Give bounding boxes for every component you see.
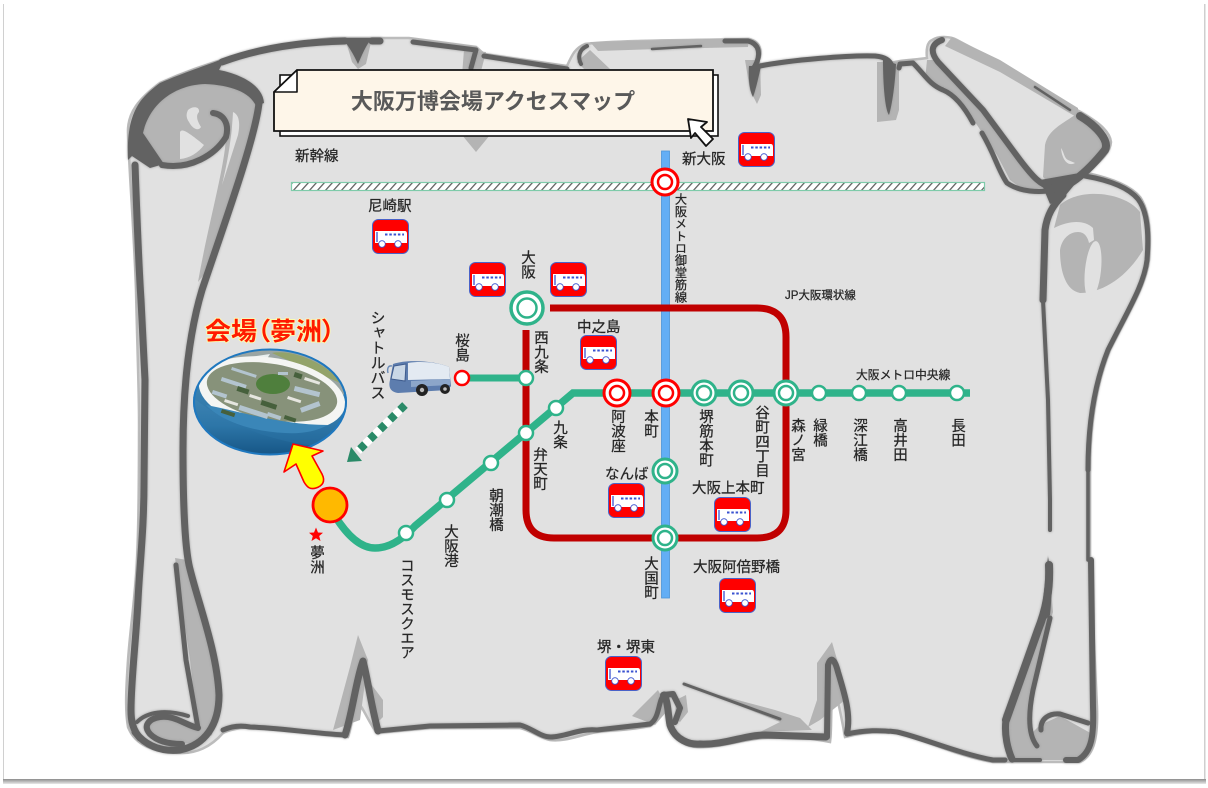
station labels: なんば [605, 466, 649, 483]
station labels: 九条 [551, 420, 567, 449]
red double-ring stations [604, 169, 679, 406]
venue aerial image [193, 348, 347, 456]
gray fold areas [140, 37, 1143, 760]
label: shinkansen: 新幹線 [295, 148, 339, 165]
title banner [274, 70, 718, 146]
label: loop line: JP大阪環状線 [785, 288, 856, 302]
bus icon: Namba [608, 484, 644, 518]
station labels: 新大阪 [682, 151, 726, 168]
bus icon: Sakai [606, 656, 642, 690]
station labels: 大阪阿倍野橋 [693, 559, 780, 576]
parchment scroll background [126, 37, 1150, 762]
bus icon: Osaka-Uehommachi [714, 498, 750, 532]
label: Midosuji line: 大阪メトロ御堂筋線 [673, 193, 687, 303]
station labels: 本町 [642, 409, 658, 438]
bus icon: Osaka left [470, 262, 506, 296]
station labels: 深江橋 [851, 418, 867, 462]
light highlights inside folds [180, 107, 1104, 300]
station labels: 大阪上本町 [692, 480, 765, 497]
venue heading: 会場（夢洲） [205, 318, 335, 346]
station labels: 西九条 [532, 330, 548, 374]
station labels: 緑橋 [811, 418, 827, 447]
green double-ring stations [511, 292, 798, 550]
Chuo line (green) [335, 393, 970, 548]
station labels: 夢洲 [308, 545, 324, 574]
scroll silhouette [126, 37, 1150, 762]
station labels: シャトルバス [368, 310, 386, 400]
Shinkansen line [292, 182, 984, 190]
bus icon: Amagasaki [372, 220, 408, 254]
station labels: 高井田 [891, 418, 907, 462]
banner title text: 大阪万博会場アクセスマップ [351, 89, 635, 114]
station labels: 大阪港 [442, 524, 458, 568]
station labels: 朝潮橋 [487, 488, 503, 532]
simple stations [399, 371, 964, 540]
dark outline strokes [128, 38, 1148, 760]
label: Chuo line: 大阪メトロ中央線 [856, 368, 951, 382]
station labels: 堺筋本町 [697, 409, 713, 467]
station labels: 大阪 [519, 250, 535, 279]
station labels: 谷町四丁目 [753, 405, 769, 478]
icon: shuttle bus [388, 361, 451, 396]
bus icon: Osaka right [550, 262, 586, 296]
station labels: 森ノ宮 [789, 418, 805, 462]
Sakurajima branch (green) [462, 374, 526, 382]
station labels: 堺・堺東 [597, 639, 655, 656]
bus icon: Osaka-Abenobashi [720, 578, 756, 612]
icon: red star [309, 528, 323, 541]
station labels: 阿波座 [609, 409, 625, 453]
station labels: 弁天町 [531, 447, 547, 491]
bus icon: Nakanoshima [580, 336, 616, 370]
top-left roll cap [128, 58, 264, 168]
bus icon: Shin-Osaka [738, 132, 774, 166]
station labels: 中之島 [577, 319, 620, 336]
station labels: 大国町 [642, 556, 658, 600]
station labels [308, 151, 965, 660]
station labels: 長田 [949, 418, 965, 447]
Midosuji line (blue) [662, 151, 670, 598]
station labels: 桜島 [453, 333, 469, 362]
yellow arrow to venue [284, 444, 324, 489]
icon: cursor arrow [688, 119, 713, 146]
arrow: shuttle route to venue [347, 405, 405, 462]
Sakurajima station [455, 371, 469, 385]
station labels: コスモスクエア [398, 558, 414, 660]
Yumeshima station [313, 488, 347, 522]
station labels: 尼崎駅 [368, 198, 412, 215]
JR Osaka loop line (red) [526, 308, 786, 538]
